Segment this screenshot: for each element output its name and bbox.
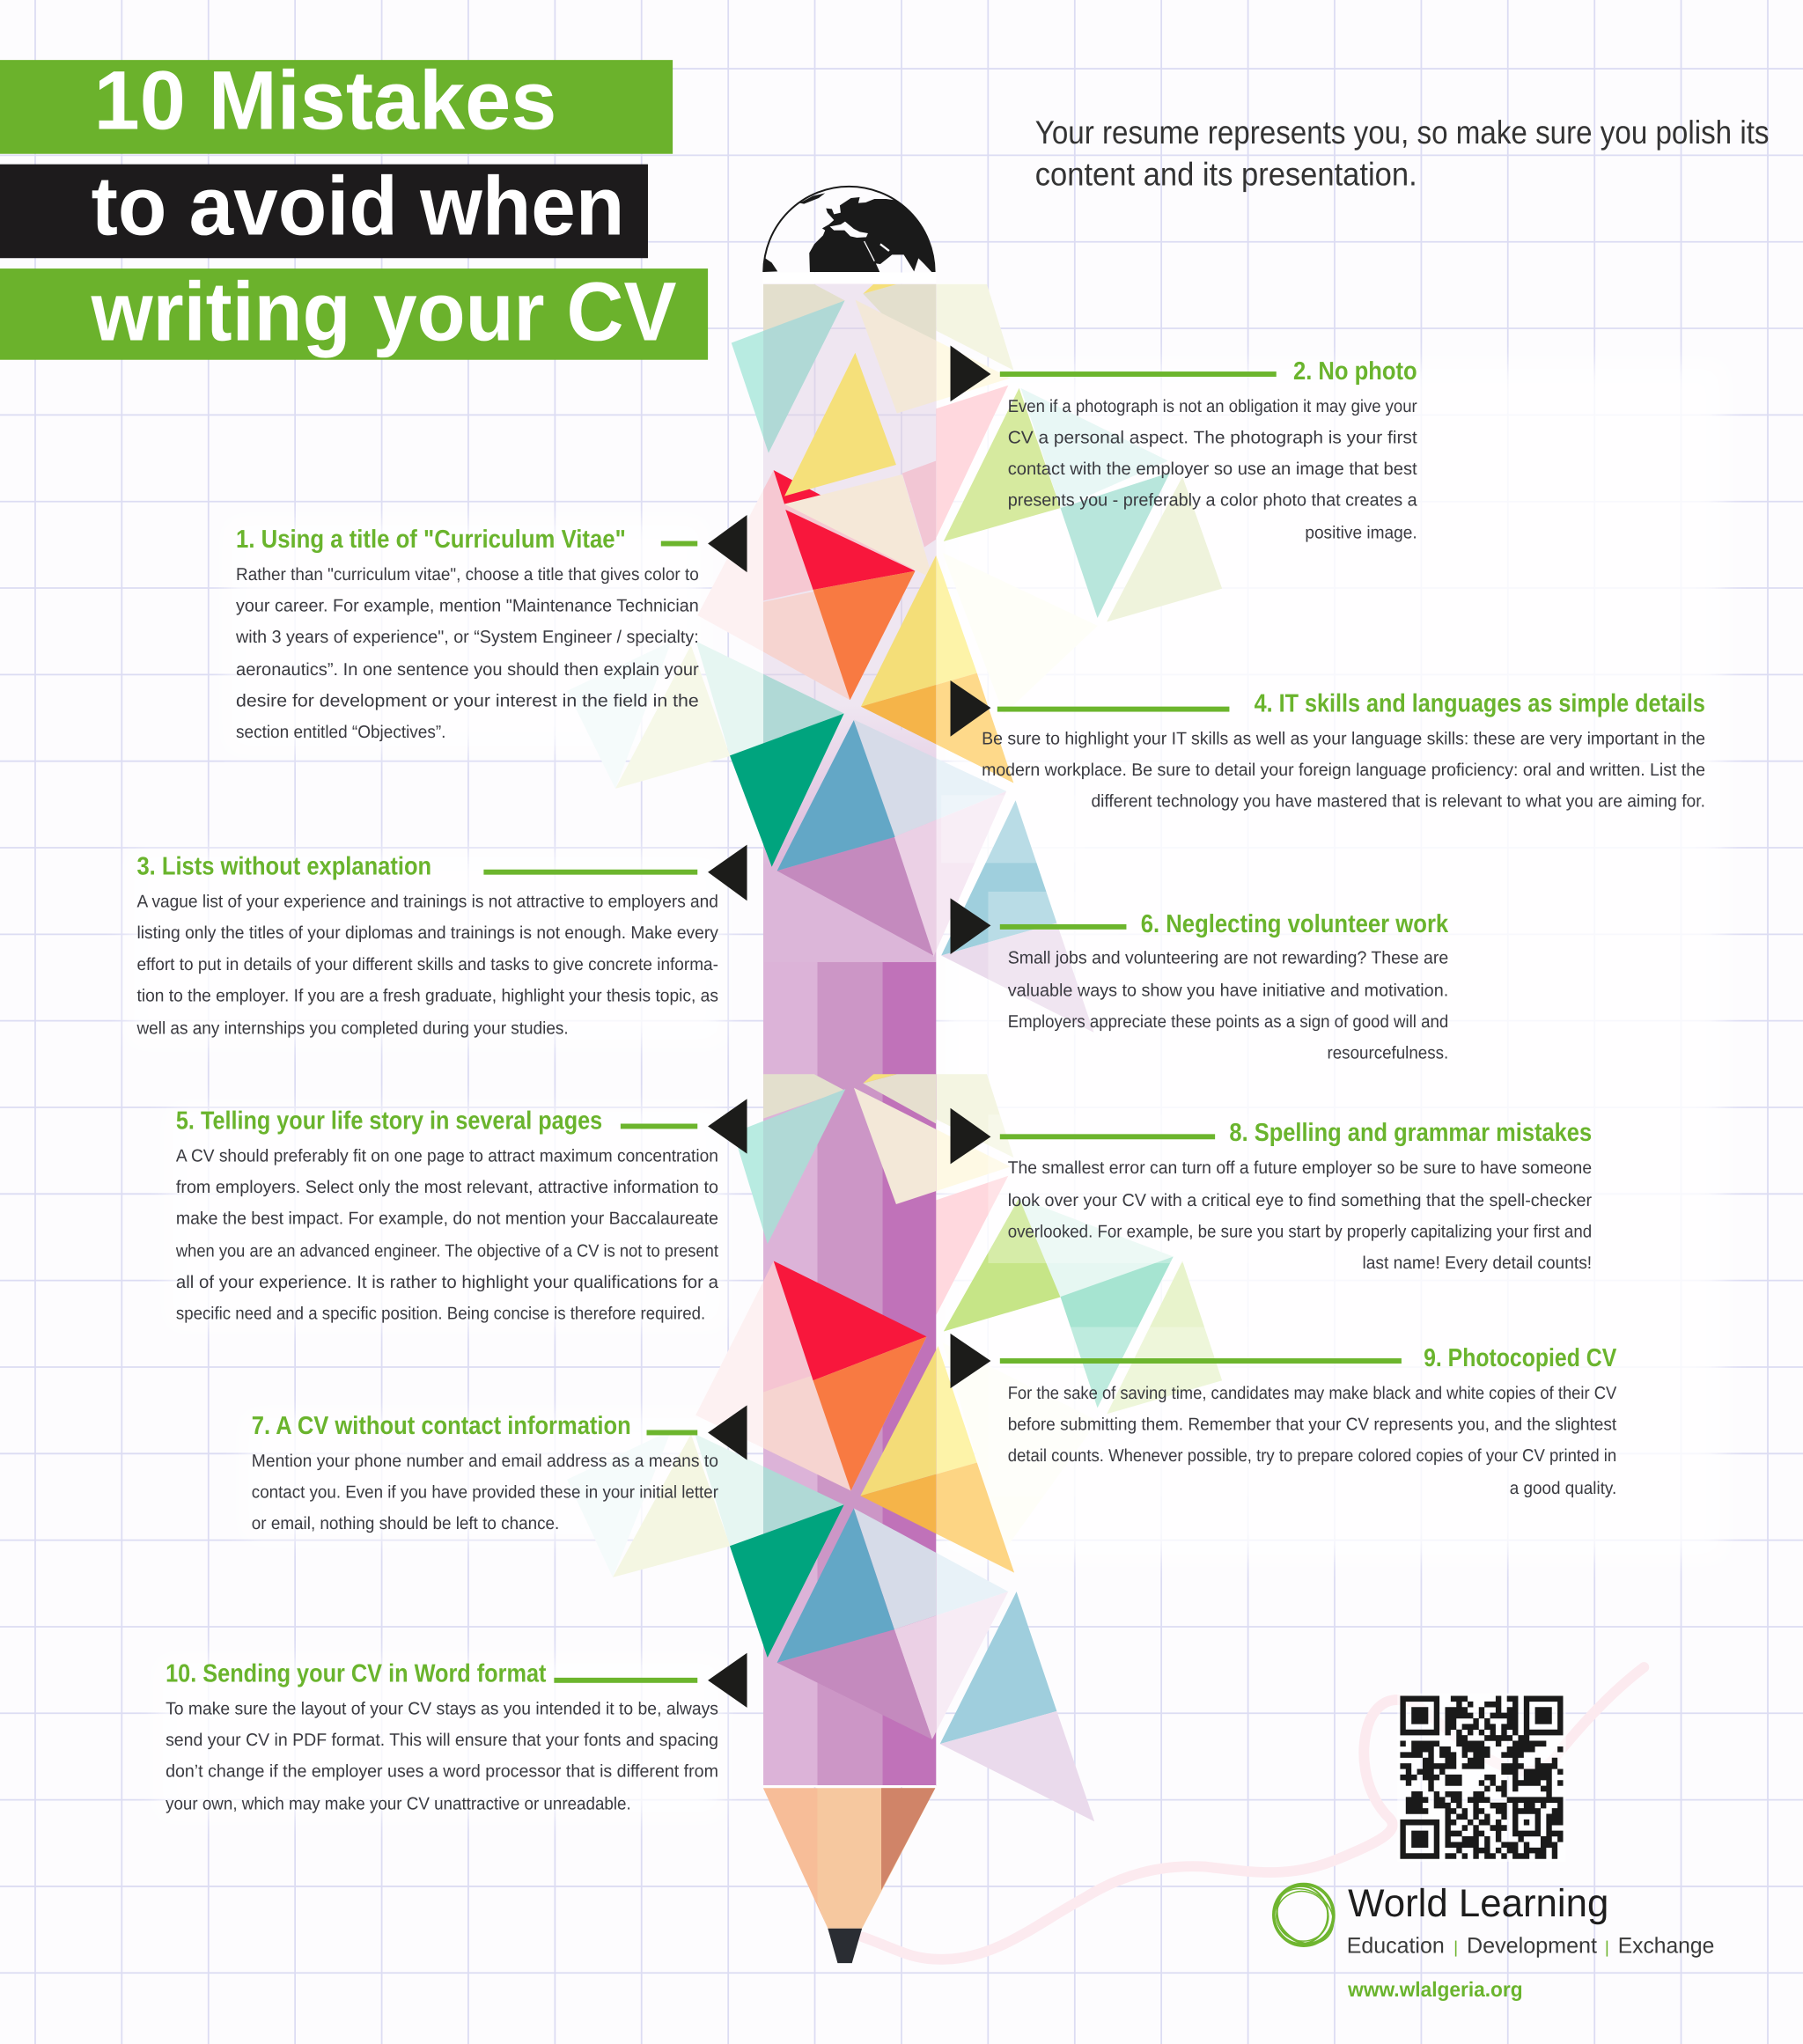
body text: Employers appreciate these points as a sign of good will and [1008,1011,1448,1031]
body text [1008,396,1417,542]
body text [1008,1158,1593,1272]
heading: 8. Spelling and grammar mistakes [1229,1119,1592,1147]
title line 1 [0,54,673,154]
arrow [951,680,990,737]
heading: 7. A CV without contact information [252,1412,631,1440]
arrow [708,1405,747,1460]
connector bar [646,1430,697,1435]
connector bar [554,1678,697,1683]
body text: modern workplace. Be sure to detail your foreign language proficiency: oral and written. List the [982,760,1705,780]
QR code [1397,1693,1566,1862]
body text: A vague list of your experience and trainings is not attractive to employers and [136,892,718,911]
logo tagline: | [1453,1937,1458,1957]
connector bar [997,707,1229,712]
body text: valuable ways to show you have initiative and motivation. [1008,981,1448,1000]
body text: before submitting them. Remember that your CV represents you, and the slightest [1008,1415,1617,1434]
body text: send your CV in PDF format. This will ensure that your fonts and spacing [166,1730,718,1749]
body text [1008,1383,1617,1498]
connector bar [1000,924,1126,930]
arrow [708,515,747,572]
body text: specific need and a specific position. Being concise is therefore required. [176,1304,705,1323]
body text: don’t change if the employer uses a word processor that is different from [166,1761,718,1781]
arrow [708,845,747,901]
logo wordmark: World Learning [1348,1882,1608,1925]
panel: mistake 1 [235,515,747,742]
body text: resourcefulness. [1327,1043,1448,1062]
body text: Be sure to highlight your IT skills as well as your language skills: these are very important in the [982,729,1705,748]
body text: look over your CV with a critical eye to find something that the spell-checker [1008,1190,1593,1209]
body text: tion to the employer. If you are a fresh graduate, highlight your thesis topic, as [136,986,718,1005]
body text: Mention your phone number and email address as a means to [252,1451,718,1470]
white wash bands over the pale triangles [941,795,1327,1496]
green triangle, section one [730,713,844,867]
body text: To make sure the layout of your CV stays as you intended it to be, always [166,1699,718,1718]
panel: mistake 9 [951,1334,1617,1498]
body text: all of your experience. It is rather to highlight your qualifications for a [176,1272,719,1292]
panel: mistake 7 [252,1405,747,1533]
body text [235,564,699,742]
pale triangles outside the pencil, section two [567,1074,1222,1821]
connector bar [1000,1358,1402,1364]
green triangle, section two [730,1504,844,1658]
body text: your career. For example, mention "Maintenance Technician [236,596,699,615]
body text: presents you - preferably a color photo that creates a [1008,490,1417,510]
triangles on the pencil, section one [763,284,937,957]
heading: 3. Lists without explanation [136,852,431,881]
heading: 4. IT skills and languages as simple details [1255,689,1705,718]
heading: 2. No photo [1293,357,1417,386]
arrow [708,1099,747,1154]
heading: 9. Photocopied CV [1424,1344,1616,1372]
body text: effort to put in details of your different skills and tasks to give concrete informa- [136,954,718,974]
body text: A CV should preferably fit on one page to attract maximum concentration [176,1146,718,1165]
body text [982,729,1705,811]
panel: mistake 5 [175,1099,747,1323]
arrow [951,1334,990,1388]
logo: World Learning [1266,1876,1714,2002]
body text: overlooked. For example, be sure you start by properly capitalizing your first and [1008,1222,1592,1241]
body text: last name! Every detail counts! [1362,1253,1592,1272]
body text: make the best impact. For example, do not mention your Baccalaureate [176,1209,718,1228]
intro text: content and its presentation. [1035,157,1417,193]
body text: with 3 years of experience", or “System Engineer / specialty: [235,627,699,647]
body text: For the sake of saving time, candidates may make black and white copies of their CV [1008,1383,1616,1402]
body text: detail counts. Whenever possible, try to prepare colored copies of your CV printed in [1008,1445,1616,1465]
connector bar [1000,1134,1215,1139]
intro text [1035,114,1769,193]
body text: CV a personal aspect. The photograph is your first [1008,428,1417,447]
heading: 5. Telling your life story in several pages [176,1107,602,1136]
body text: well as any internships you completed during your studies. [136,1018,569,1038]
pencil tip [763,1788,935,1963]
heading: 1. Using a title of "Curriculum Vitae" [236,526,626,554]
website URL: www.wlalgeria.org [1347,1980,1523,2002]
pencil illustration [567,283,1222,1963]
icon: globe [763,187,935,272]
body text [1008,948,1448,1062]
body text: from employers. Select only the most relevant, attractive information to [176,1177,718,1196]
icon: green scribble ring [1266,1876,1344,1955]
body text [252,1451,719,1533]
body text: Even if a photograph is not an obligation it may give your [1008,396,1417,415]
panel: mistake 4 [951,680,1705,811]
triangles on the pencil, section two [763,1074,937,1739]
logo tagline: Education [1347,1933,1445,1958]
body text: a good quality. [1510,1478,1616,1498]
body text: positive image. [1305,523,1417,542]
connector bar [661,541,697,546]
panel: mistake 8 [951,1108,1593,1272]
title line 1: 10 Mistakes [94,54,556,147]
title line 2: to avoid when [92,159,624,253]
body text: your own, which may make your CV unattractive or unreadable. [166,1794,631,1813]
body text [136,892,718,1038]
connector bar [483,870,697,875]
decorative pink squiggle [863,1667,1644,1959]
body text [166,1699,718,1813]
title line 3: writing your CV [90,265,677,358]
body text: Rather than "curriculum vitae", choose a title that gives color to [236,564,699,584]
body text: contact with the employer so use an image that best [1008,459,1417,478]
body text: when you are an advanced engineer. The objective of a CV is not to present [175,1241,718,1261]
arrow [951,345,990,401]
body text: different technology you have mastered that is relevant to what you are aiming for. [1091,791,1705,811]
blue triangle, section one [777,720,895,871]
logo tagline: Development [1467,1933,1597,1958]
arrow [951,898,990,954]
panel: mistake 3 [136,845,747,1038]
body text: listing only the titles of your diplomas and trainings is not enough. Make every [136,923,718,943]
title [0,54,708,360]
panel: mistake 6 [951,898,1448,1062]
connector bar [1000,371,1277,377]
body text: The smallest error can turn off a future employer so be sure to have someone [1008,1158,1592,1177]
pencil body [763,284,936,1787]
heading: 6. Neglecting volunteer work [1141,910,1448,938]
logo tagline: | [1605,1937,1609,1957]
connector bar [621,1124,697,1129]
body text: contact you. Even if you have provided these in your initial letter [252,1482,719,1502]
body text: aeronautics”. In one sentence you should then explain your [236,659,699,680]
arrow [708,1653,747,1708]
blue triangle, section two [777,1508,894,1663]
body text [175,1146,719,1323]
arrow [951,1108,990,1164]
panel: mistake 10 [166,1653,747,1813]
heading: 10. Sending your CV in Word format [166,1659,547,1688]
pale triangles outside the pencil, section one [567,284,1222,1033]
body text: desire for development or your interest in the field in the [236,691,699,710]
logo tagline [1347,1933,1714,1958]
panel: mistake 2 [951,345,1417,542]
body text: Small jobs and volunteering are not rewarding? These are [1008,948,1448,967]
body text: or email, nothing should be left to chance. [252,1513,559,1533]
logo tagline: Exchange [1618,1933,1714,1958]
body text: section entitled “Objectives”. [236,722,445,742]
